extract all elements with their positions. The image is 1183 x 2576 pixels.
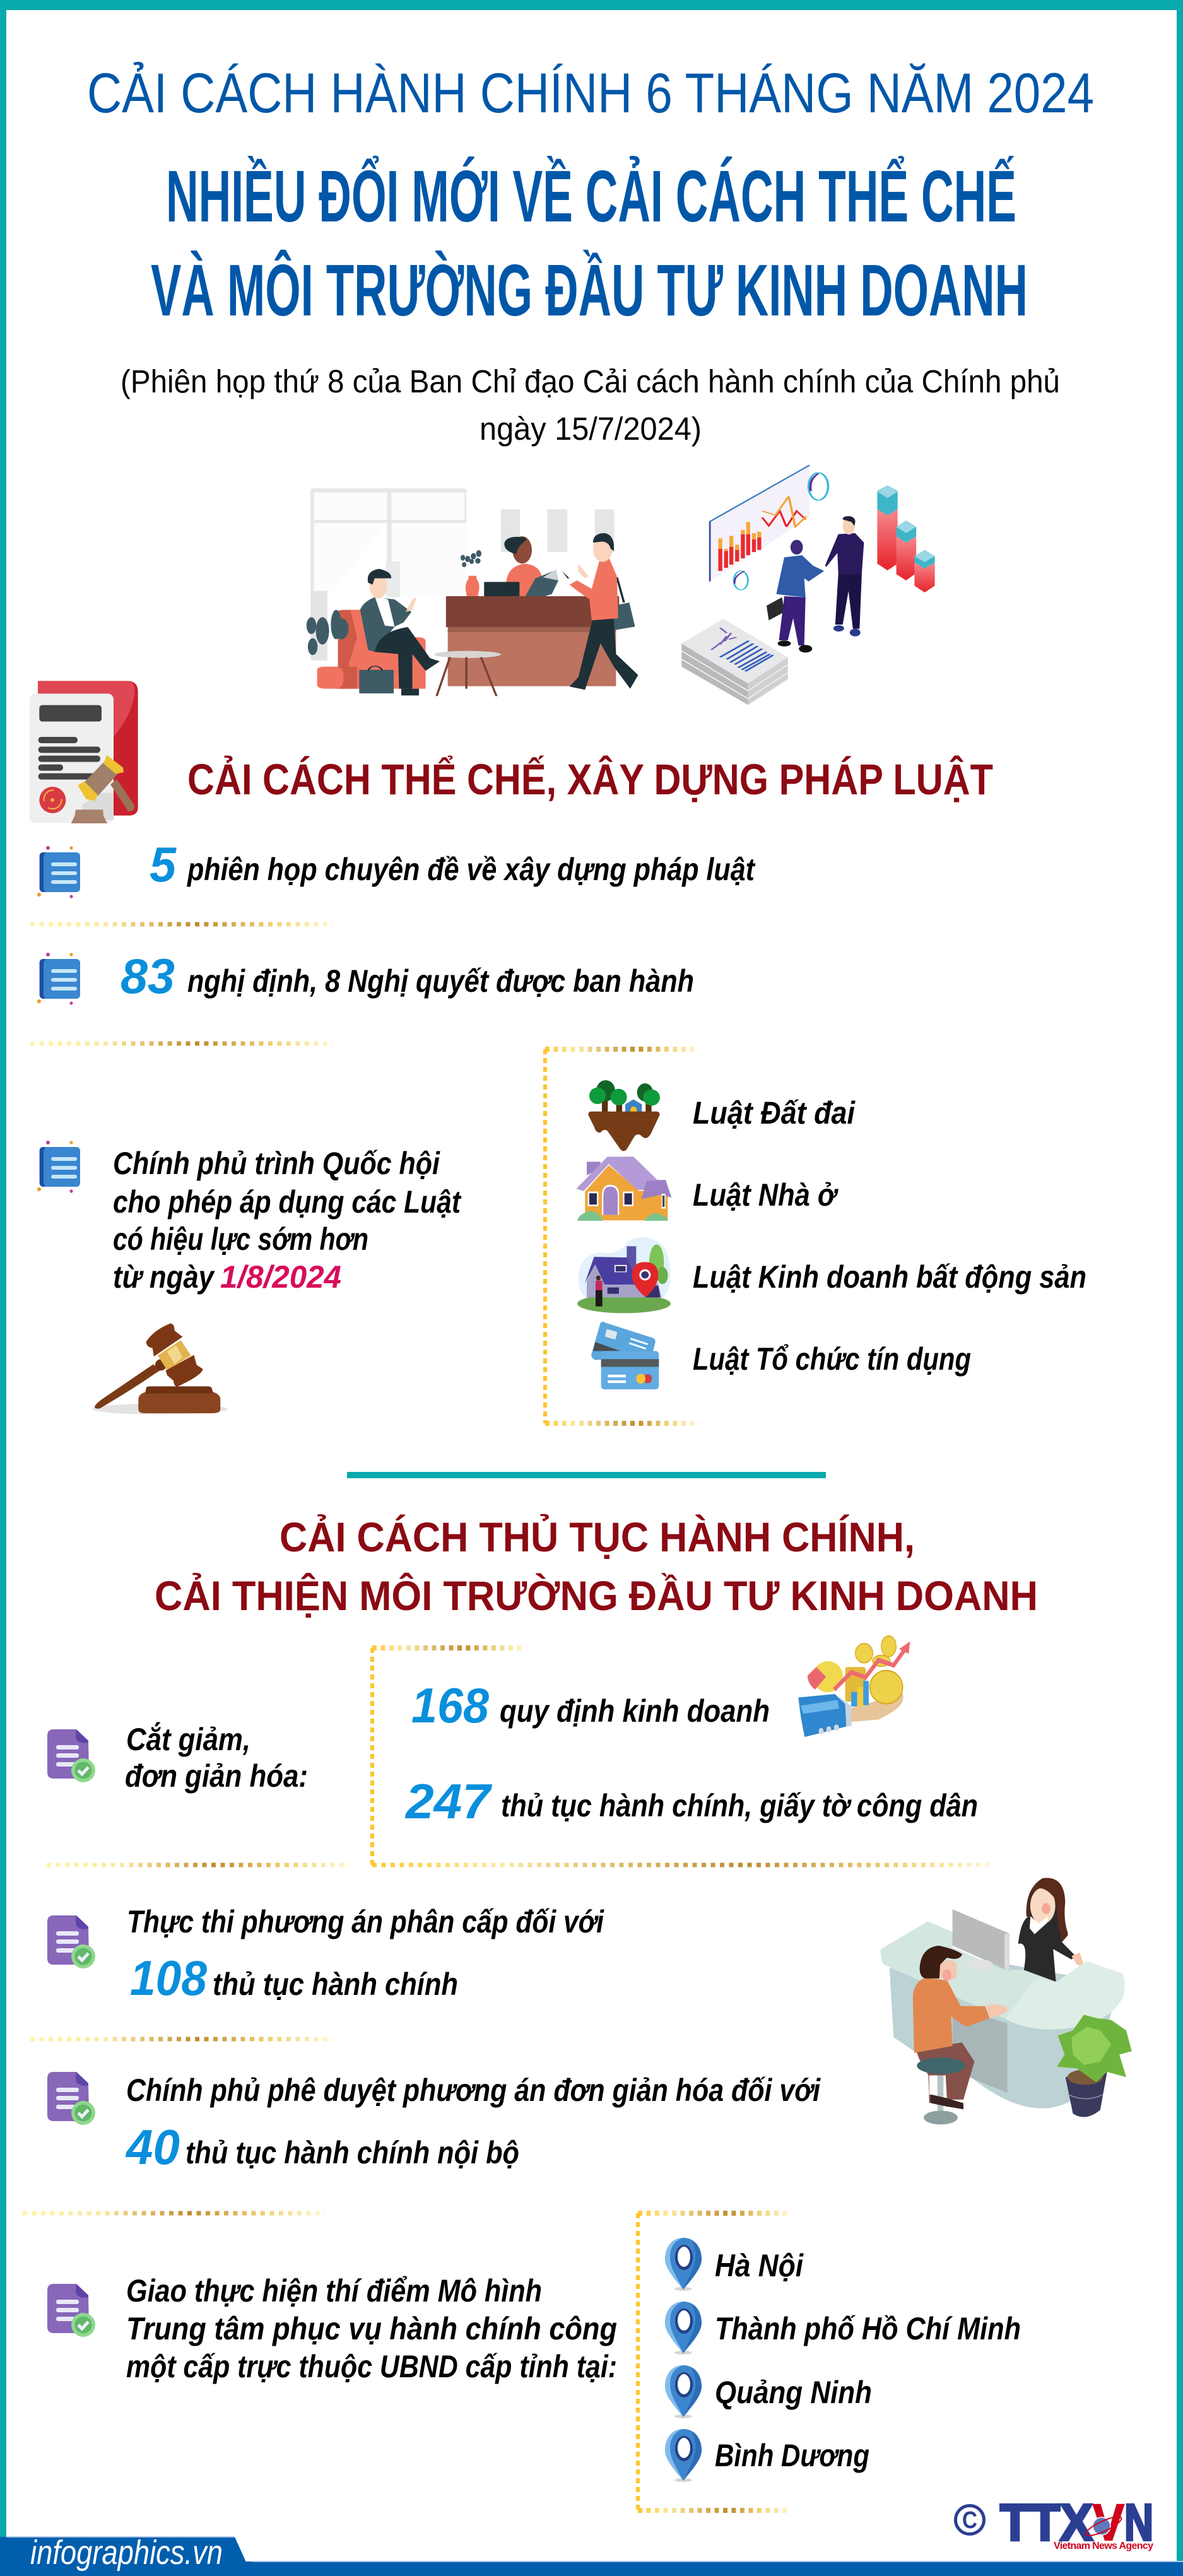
location: Ho Chi Minh City xyxy=(665,2302,1021,2355)
icon: blue list xyxy=(37,953,80,1005)
text line: Chính phủ phê duyệt phương án đơn giản hóa đối với xyxy=(126,2073,821,2108)
label: 108: thủ tục hành chính xyxy=(213,1967,458,2002)
icon: purple document xyxy=(47,2072,95,2125)
location: Hanoi: Hà Nội xyxy=(715,2248,804,2283)
location: Binh Duong xyxy=(665,2429,869,2482)
location: Quang Ninh xyxy=(665,2365,872,2418)
location: Binh Duong: Bình Dương xyxy=(715,2438,869,2473)
text line 1: Cắt giảm, xyxy=(126,1722,250,1757)
location: Quang Ninh: Quảng Ninh xyxy=(715,2375,872,2410)
row: 83 decrees xyxy=(37,948,694,1005)
logo: TTXVN: Vietnam News Agency xyxy=(1054,2541,1153,2551)
text line 3: một cấp trực thuộc UBND cấp tỉnh tại: xyxy=(126,2349,617,2384)
illustration: service counter xyxy=(881,1878,1132,2124)
logo: TTXVN xyxy=(955,2494,1153,2551)
label: land law: Luật Đất đai xyxy=(693,1095,856,1131)
icon: blue list xyxy=(37,1141,80,1193)
row: reduce and simplify xyxy=(47,1722,308,1794)
text line 2: đơn giản hóa: xyxy=(125,1758,308,1794)
subtitle line 1: (Phiên họp thứ 8 của Ban Chỉ đạo Cải cách hành chính của Chính phủ xyxy=(121,363,1060,399)
icon: real estate xyxy=(577,1237,671,1313)
location: Ho Chi Minh City: Thành phố Hồ Chí Minh xyxy=(715,2311,1021,2346)
logo: TTXVN: V xyxy=(1093,2494,1124,2551)
number 83: 83 xyxy=(121,948,175,1004)
label: real estate law: Luật Kinh doanh bất động sản xyxy=(693,1259,1086,1295)
subtitle line 2: ngày 15/7/2024) xyxy=(480,411,702,447)
row: internal procedures xyxy=(47,2072,821,2175)
heading: section 1: CẢI CÁCH THỂ CHẾ, XÂY DỰNG PHÁP LUẬT xyxy=(187,755,993,804)
logo: TTXVN: TTX xyxy=(1000,2494,1093,2551)
label: housing law: Luật Nhà ở xyxy=(693,1177,839,1213)
text line 3: có hiệu lực sớm hơn xyxy=(113,1221,368,1257)
bracket: laws list xyxy=(545,1049,698,1423)
text line 2: Trung tâm phục vụ hành chính công xyxy=(126,2311,617,2346)
stat: 168: 168 xyxy=(411,1678,490,1733)
label: 247: thủ tục hành chính, giấy tờ công dân xyxy=(501,1788,978,1823)
icon: purple document xyxy=(47,1915,95,1968)
text line: Thực thi phương án phân cấp đối với xyxy=(127,1904,604,1939)
icon: purple document xyxy=(47,1729,95,1782)
icon: bank cards xyxy=(591,1322,659,1389)
icon: house xyxy=(576,1156,671,1221)
icon: land plot xyxy=(588,1080,660,1151)
label: 40: thủ tục hành chính nội bộ xyxy=(185,2135,519,2170)
location: Hanoi xyxy=(665,2238,804,2291)
bracket: pilot provinces xyxy=(638,2213,791,2510)
row: pilot model xyxy=(47,2273,617,2384)
icon: purple document xyxy=(47,2284,95,2337)
icon: hand with coins xyxy=(798,1636,910,1737)
number 5: 5 xyxy=(150,837,177,892)
row: government proposal xyxy=(37,1141,462,1295)
text line 1: Giao thực hiện thí điểm Mô hình xyxy=(126,2273,542,2308)
stat: 247: 247 xyxy=(404,1773,493,1829)
footer band xyxy=(0,2534,1183,2576)
source url: infographics.vn xyxy=(30,2534,223,2572)
stat: 40: 40 xyxy=(125,2119,180,2175)
icon: blue list xyxy=(37,846,80,898)
logo: TTXVN: C xyxy=(962,2507,977,2534)
text line 2: cho phép áp dụng các Luật xyxy=(113,1184,462,1220)
text line 1: Chính phủ trình Quốc hội xyxy=(113,1146,440,1181)
row: 5 sessions xyxy=(37,837,756,898)
text: nghị định, 8 Nghị quyết được ban hành xyxy=(187,963,694,999)
icon: legal document with gavel xyxy=(30,681,138,823)
stat: 108: 108 xyxy=(130,1950,208,2006)
logo: TTXVN: N xyxy=(1124,2494,1153,2551)
bracket: reductions xyxy=(372,1648,993,1865)
icon: gavel xyxy=(92,1324,228,1414)
text line 4: từ ngày xyxy=(113,1259,215,1295)
text: phiên họp chuyên đề về xây dựng pháp luật xyxy=(186,852,756,887)
label: credit law: Luật Tổ chức tín dụng xyxy=(693,1341,971,1377)
row: decentralisation xyxy=(47,1904,604,2006)
heading: section 2 line 1: CẢI CÁCH THỦ TỤC HÀNH CHÍNH, xyxy=(280,1514,915,1560)
teal divider bar xyxy=(347,1472,826,1478)
label: 168: quy định kinh doanh xyxy=(500,1693,770,1729)
date highlight: 1/8/2024 xyxy=(220,1259,341,1295)
heading: section 2 line 2: CẢI THIỆN MÔI TRƯỜNG ĐẦU TƯ KINH DOANH xyxy=(155,1572,1038,1619)
illustration: office reception xyxy=(307,488,638,696)
illustration: business handshake and data xyxy=(681,465,935,705)
